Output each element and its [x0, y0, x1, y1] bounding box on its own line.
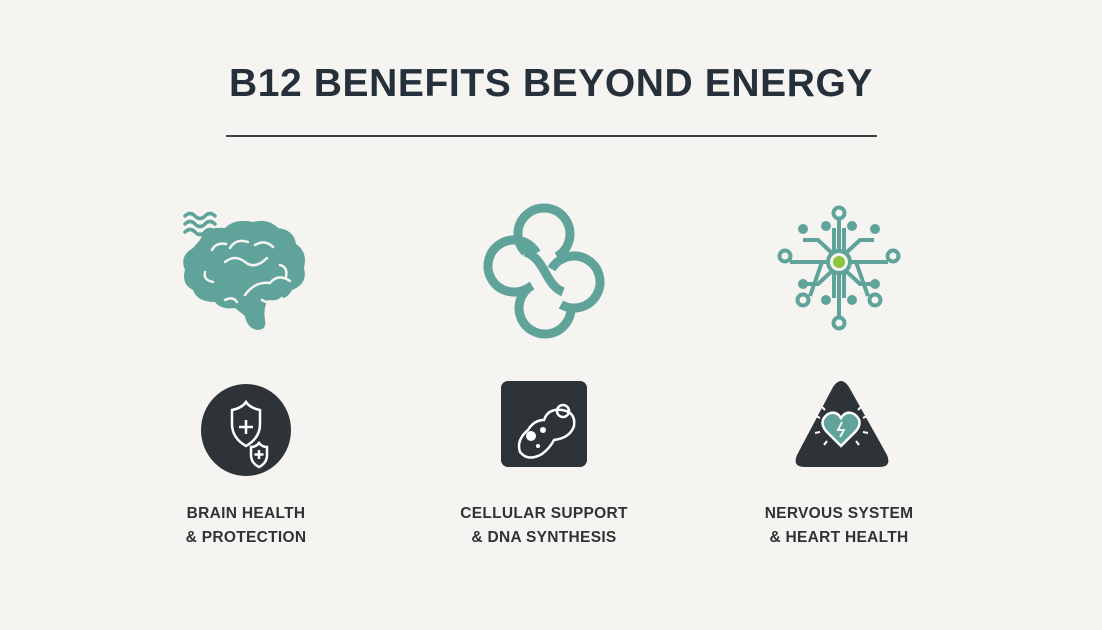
icon: neuron: [778, 206, 900, 330]
label: cellular support: & DNA SYNTHESIS: [471, 529, 617, 546]
label: nervous system: [765, 505, 913, 546]
title: B12 BENEFITS BEYOND ENERGY: [229, 62, 873, 105]
label: brain health: BRAIN HEALTH: [187, 505, 305, 522]
label: cellular support: CELLULAR SUPPORT: [460, 505, 628, 522]
icon: heart triangle: [796, 381, 888, 467]
label: nervous system: & HEART HEALTH: [769, 529, 909, 546]
label: cellular support: [460, 505, 628, 546]
icon: brain: [183, 212, 305, 330]
label: nervous system: NERVOUS SYSTEM: [765, 505, 913, 522]
icon: shield circle: [201, 384, 291, 476]
icon: knot: [483, 204, 605, 338]
icon: cell square: [501, 381, 587, 467]
label: brain health: & PROTECTION: [186, 529, 306, 546]
label: brain health: [186, 505, 306, 546]
